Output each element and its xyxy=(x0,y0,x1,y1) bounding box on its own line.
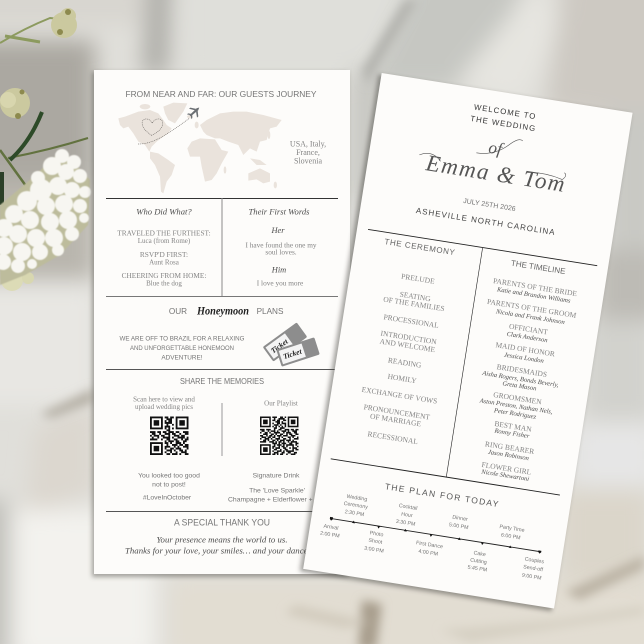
panel: wedding pics QR: You looked too good xyxy=(138,472,200,480)
timeline chart: plan for today: 3:00 PM xyxy=(364,546,384,555)
panel: the timeline: OFFICIANT xyxy=(508,322,549,337)
shadow: left card xyxy=(92,72,348,577)
timeline chart: plan for today xyxy=(318,491,550,582)
panel: the timeline: FLOWER GIRL xyxy=(481,460,532,477)
timeline chart: plan for today: Couples xyxy=(524,556,545,565)
panel: the timeline: Jessica London xyxy=(503,352,544,365)
icon: tickets: Ticket xyxy=(269,336,290,355)
panel: their first words: I love you more xyxy=(257,278,303,288)
timeline chart: plan for today: Ceremony xyxy=(343,501,369,511)
timeline chart: plan for today: 2:00 PM xyxy=(320,531,340,540)
panel: who did what: CHEERING FROM HOME: xyxy=(122,271,206,280)
welcome heading: THE WEDDING xyxy=(470,114,537,133)
panel: their first words: soul loves. xyxy=(265,248,297,256)
thank you message xyxy=(125,534,334,556)
panel: the ceremony xyxy=(354,237,461,448)
panel: the ceremony: INTRODUCTION xyxy=(380,329,438,346)
panel: who did what: Blue the dog xyxy=(146,280,182,288)
panel: the timeline: Aston Preston, Nathan Nels, xyxy=(478,397,553,416)
heading: a special thank you: A SPECIAL THANK YOU xyxy=(174,518,270,528)
timeline chart: plan for today: Arrival xyxy=(323,524,339,532)
panel: wedding pics QR: upload wedding pics xyxy=(135,403,193,411)
guest countries: France, xyxy=(296,148,320,157)
timeline chart: plan for today: Dinner xyxy=(452,515,468,523)
date: JULY 25TH 2026 xyxy=(463,198,516,213)
decoration: yarrow flowers and stems xyxy=(0,8,91,291)
route: dotted heart and flight path xyxy=(138,118,189,144)
panel: honeymoon: PLANS xyxy=(257,307,284,316)
timeline chart: plan for today: First Dance xyxy=(416,540,443,550)
panel: playlist QR: Our Playlist xyxy=(264,400,298,408)
icon: plane xyxy=(185,103,203,121)
timeline chart: plan for today: Cocktail xyxy=(398,503,418,512)
panel: the timeline: Greta Mason xyxy=(502,380,537,393)
welcome heading xyxy=(470,102,539,133)
timeline chart: plan for today: Photo xyxy=(369,530,384,538)
thank you message: Your presence means the world to us. xyxy=(156,534,288,544)
thank you message: Thanks for your love, your smiles… and your dance moves. xyxy=(125,546,334,556)
title: guests journey: FROM NEAR AND FAR: OUR GUESTS JOURNEY xyxy=(126,89,317,99)
panel: the ceremony: EXCHANGE OF VOWS xyxy=(361,385,438,406)
panel: wedding pics QR: Scan here to view and xyxy=(133,396,195,404)
panel: the timeline: Aisha Rogers, Bonds Beverly, xyxy=(481,370,559,389)
panel: the timeline: PARENTS OF THE GROOM xyxy=(486,297,577,320)
panel: their first words: I have found the one my xyxy=(245,240,317,250)
panel: the ceremony: OF THE FAMILIES xyxy=(383,295,445,313)
timeline chart: plan for today: 3:30 PM xyxy=(395,519,416,528)
panel: who did what xyxy=(117,206,211,288)
panel: playlist QR: The 'Love Sparkle' xyxy=(249,488,305,494)
panel: honeymoon: ADVENTURE! xyxy=(161,354,203,362)
timeline chart: plan for today: 5:00 PM xyxy=(448,522,469,531)
panel: left card xyxy=(94,70,350,574)
timeline chart: plan for today: Cake xyxy=(473,550,486,558)
icon: tickets: Ticket xyxy=(282,346,304,361)
panel: the timeline: Ronny Fisher xyxy=(493,427,530,440)
panel: honeymoon: AND UNFORGETTABLE HONEMOON xyxy=(130,345,234,352)
timeline chart: plan for today: 5:45 PM xyxy=(467,565,487,574)
panel: playlist QR xyxy=(228,400,337,504)
panel: honeymoon: Honeymoon xyxy=(196,304,249,318)
timeline chart: plan for today: Hour xyxy=(401,512,413,519)
timeline chart: plan for today: Party Time xyxy=(499,524,525,534)
panel: wedding pics QR: #LoveInOctober xyxy=(143,494,192,502)
panel: the timeline: PARENTS OF THE BRIDE xyxy=(493,276,578,298)
script: couple names: Emma & Tom xyxy=(423,150,566,197)
panel: the timeline: Clark Anderson xyxy=(506,331,548,344)
panel: the ceremony: PROCESSIONAL xyxy=(383,312,440,330)
timeline chart: plan for today: 2:30 PM xyxy=(344,509,365,518)
panel: the timeline: Nicole Shewartoni xyxy=(480,468,530,483)
shadow: right card xyxy=(300,75,630,611)
panel: their first words xyxy=(245,206,317,288)
panel: the timeline: BEST MAN xyxy=(494,419,533,434)
panel: wedding pics QR: not to post! xyxy=(152,482,186,488)
QR code: wedding pics xyxy=(150,416,188,455)
panel: the ceremony: HOMILY xyxy=(387,372,418,385)
panel: the ceremony: OF MARRIAGE xyxy=(369,411,422,428)
panel: the ceremony: READING xyxy=(387,356,423,370)
world map xyxy=(118,103,282,193)
panel: honeymoon: WE ARE OFF TO BRAZIL FOR A RELAXING xyxy=(120,336,245,342)
QR code: playlist xyxy=(260,416,298,455)
heading: the plan for today: THE PLAN FOR TODAY xyxy=(384,481,500,509)
heading: share the memories: SHARE THE MEMORIES xyxy=(180,376,264,386)
panel: the timeline: GROOMSMEN xyxy=(493,390,543,407)
panel: who did what: TRAVELED THE FURTHEST: xyxy=(117,228,211,238)
panel: playlist QR: Champagne + Elderflower + Berries xyxy=(228,496,337,504)
location: ASHEVILLE NORTH CAROLINA xyxy=(415,206,556,237)
panel: the ceremony: PRONOUNCEMENT xyxy=(363,402,431,422)
script: of: of xyxy=(487,138,506,159)
panel: the timeline: BRIDESMAIDS xyxy=(496,362,548,379)
panel: the timeline: Katie and Brandon Williams xyxy=(496,286,571,305)
panel: the timeline xyxy=(460,256,584,486)
panel: right card (wedding program) xyxy=(303,73,633,609)
panel: who did what: Aunt Rosa xyxy=(149,258,180,266)
panel: the timeline: Nicola and Frank Johnson xyxy=(494,308,565,326)
panel: who did what: RSVP'D FIRST: xyxy=(140,250,188,259)
panel: the ceremony: THE CEREMONY xyxy=(384,237,456,257)
panel: the timeline: RING BEARER xyxy=(484,439,535,456)
panel: their first words: Him xyxy=(271,266,286,274)
guest countries: Slovenia xyxy=(294,156,322,166)
guest countries: USA, Italy, xyxy=(290,140,326,148)
panel: their first words: Their First Words xyxy=(249,206,310,216)
timeline chart: plan for today: 6:00 PM xyxy=(501,532,521,541)
timeline chart: plan for today: 9:00 PM xyxy=(521,573,542,582)
panel: their first words: Her xyxy=(270,226,285,235)
panel: the timeline: MAID OF HONOR xyxy=(495,340,556,358)
panel: playlist QR: Signature Drink xyxy=(253,472,300,480)
panel: the timeline: Jason Robinson xyxy=(487,449,529,462)
timeline chart: plan for today: 4:00 PM xyxy=(418,549,438,558)
guest countries xyxy=(290,140,326,166)
panel: the timeline: Peter Rodriguez xyxy=(493,407,537,421)
panel: wedding pics QR xyxy=(133,396,200,502)
panel: who did what: Who Did What? xyxy=(136,206,192,216)
timeline chart: plan for today: Shoot xyxy=(368,538,383,546)
panel: the ceremony: RECESSIONAL xyxy=(367,429,419,446)
timeline chart: plan for today: Cutting xyxy=(470,557,487,566)
panel: honeymoon xyxy=(120,304,284,362)
script: of xyxy=(476,133,523,162)
timeline markers xyxy=(329,517,541,554)
panel: the ceremony: SEATING xyxy=(399,290,432,303)
timeline chart: plan for today: Send-off xyxy=(523,564,544,573)
welcome heading: WELCOME TO xyxy=(473,102,537,121)
timeline chart: plan for today: Wedding xyxy=(346,494,368,503)
panel: the timeline: THE TIMELINE xyxy=(510,259,566,276)
icon: tickets xyxy=(263,322,320,367)
panel: honeymoon: OUR xyxy=(169,307,187,316)
panel: the ceremony: AND WELCOME xyxy=(379,337,436,354)
panel: who did what: Luca (from Rome) xyxy=(138,237,191,245)
panel: the ceremony: PRELUDE xyxy=(401,272,436,286)
